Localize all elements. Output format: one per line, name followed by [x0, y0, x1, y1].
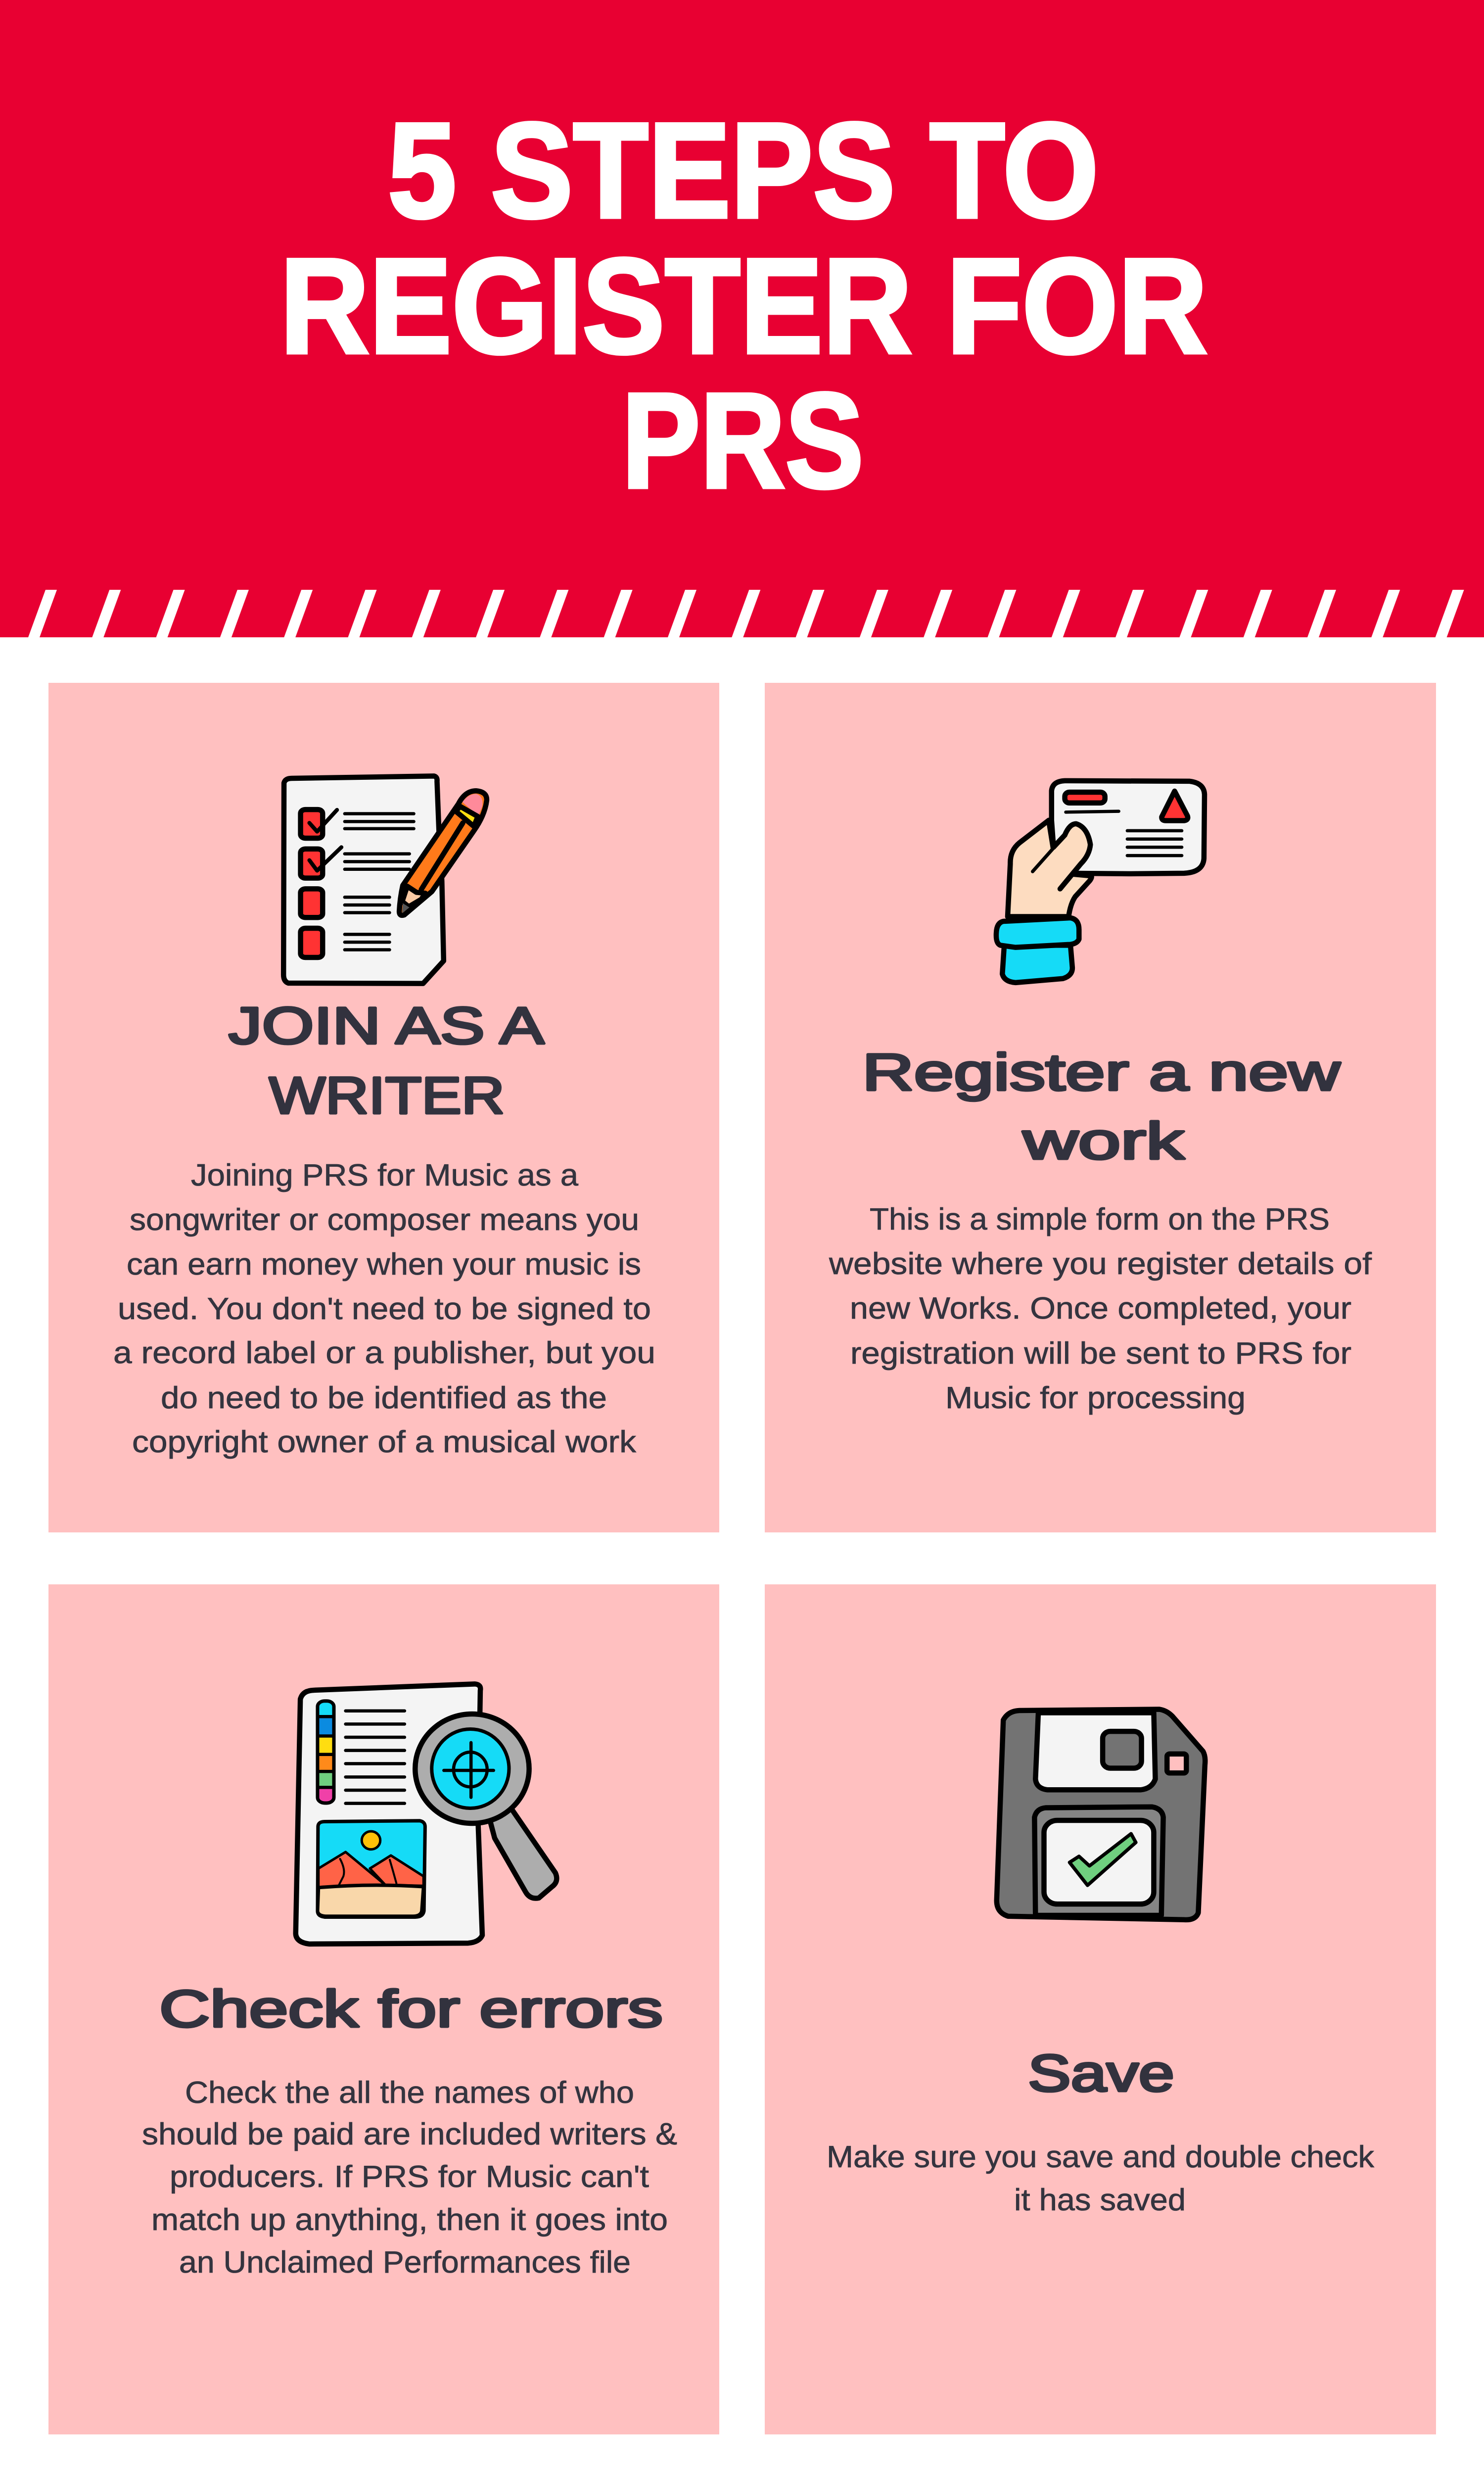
body text: Make sure you save and double check: [827, 2140, 1375, 2174]
heading: Save: [1028, 2045, 1174, 2102]
heading: [862, 1044, 1341, 1170]
body text: website where you register details of: [829, 1247, 1372, 1281]
header band with title: [0, 0, 1484, 637]
body text: do need to be identified as the: [161, 1381, 607, 1415]
body text: songwriter or composer means you: [130, 1203, 639, 1237]
body text: it has saved: [1014, 2183, 1186, 2217]
body text: Joining PRS for Music as a: [191, 1158, 579, 1192]
panel: join as a writer: [48, 683, 719, 1532]
panel: register a new work: [765, 683, 1436, 1532]
title: [280, 95, 1207, 517]
body text: Music for processing: [945, 1381, 1246, 1415]
heading: JOIN AS A: [229, 997, 544, 1055]
heading: Register a new: [862, 1044, 1341, 1101]
body text: can earn money when your music is: [127, 1247, 641, 1282]
body text: an Unclaimed Performances file: [179, 2245, 631, 2280]
body text: [829, 1202, 1372, 1415]
icon: document and magnifying glass: [296, 1684, 556, 1944]
icon: checklist and pencil: [283, 776, 487, 984]
panel: check for errors: [48, 1584, 719, 2434]
body text: producers. If PRS for Music can't: [170, 2160, 649, 2194]
body text: [142, 2076, 677, 2280]
icon: hand holding card: [996, 781, 1205, 983]
title: REGISTER FOR: [280, 231, 1207, 382]
body text: a record label or a publisher, but you: [113, 1336, 655, 1370]
body text: [827, 2140, 1375, 2217]
body text: This is a simple form on the PRS: [870, 1202, 1330, 1237]
heading: Check for errors: [159, 1980, 663, 2038]
heading: WRITER: [269, 1067, 505, 1125]
body text: [113, 1158, 655, 1459]
heading: work: [1022, 1112, 1185, 1170]
body text: should be paid are included writers &: [142, 2117, 677, 2151]
panel: save: [765, 1584, 1436, 2434]
icon: floppy disk with tick: [997, 1710, 1205, 1920]
title: PRS: [622, 365, 864, 517]
heading: [229, 997, 544, 1125]
title: 5 STEPS TO: [388, 95, 1099, 246]
body text: new Works. Once completed, your: [850, 1291, 1351, 1326]
body text: match up anything, then it goes into: [151, 2203, 668, 2237]
body text: Check the all the names of who: [185, 2076, 634, 2110]
body text: used. You don't need to be signed to: [118, 1292, 651, 1326]
body text: registration will be sent to PRS for: [850, 1336, 1351, 1371]
body text: copyright owner of a musical work: [132, 1425, 637, 1459]
white stripes: [0, 590, 1484, 637]
